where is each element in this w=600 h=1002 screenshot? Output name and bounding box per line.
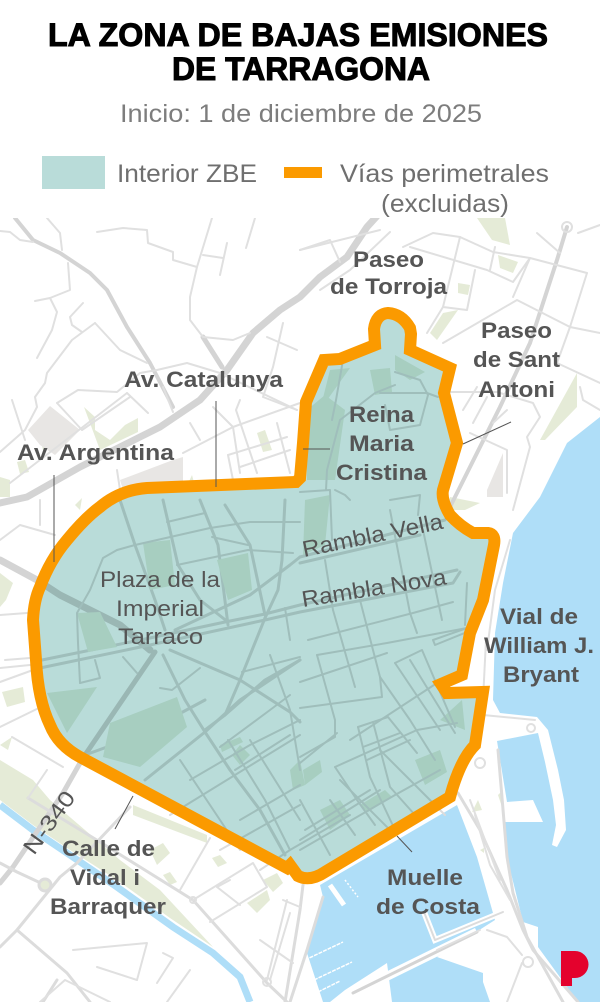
street label: Reina Maria Cristina: Maria	[349, 431, 415, 456]
legend swatch: interior ZBE	[42, 156, 105, 189]
place label: Plaza de la Imperial Tarraco	[102, 571, 220, 644]
street label: Calle de Vidal i Barraquer: Calle de	[62, 836, 155, 861]
street label: Paseo de Torroja: Paseo	[353, 247, 424, 272]
interior parks	[47, 355, 465, 830]
place label: Plaza de la Imperial Tarraco: Tarraco	[118, 624, 203, 649]
street label: N-340: N-340	[18, 786, 80, 859]
street label: Vial de William J. Bryant: William J.	[484, 633, 594, 658]
ZBE perimeter roads	[33, 313, 494, 878]
secondary roads	[0, 500, 578, 1002]
legend label: perimeter roads	[340, 160, 549, 218]
place label: Plaza de la Imperial Tarraco: Plaza de la	[100, 567, 221, 592]
water: sea and port	[0, 417, 600, 1002]
street label: Vial de William J. Bryant: Bryant	[503, 662, 580, 687]
place label: Plaza de la Imperial Tarraco: Imperial	[116, 596, 204, 621]
land details: piers	[305, 880, 503, 1002]
street label: Calle de Vidal i Barraquer: Barraquer	[50, 894, 166, 919]
legend label: perimeter roads: Vías perimetrales	[340, 160, 549, 188]
street label: Calle de Vidal i Barraquer: Vidal i	[70, 865, 140, 890]
street label: Muelle de Costa: Muelle	[387, 865, 463, 890]
street label: Paseo de Torroja	[331, 252, 448, 298]
title	[48, 17, 548, 87]
street label: Reina Maria Cristina: Cristina	[336, 460, 428, 485]
title: LA ZONA DE BAJAS EMISIONES	[48, 17, 548, 53]
legend label: interior ZBE: Interior ZBE	[117, 160, 257, 188]
street label: Paseo de Sant Antoni: Paseo	[481, 318, 552, 343]
leader lines	[54, 401, 511, 852]
street label: Vial de William J. Bryant: Vial de	[500, 604, 578, 629]
interior streets	[77, 360, 467, 870]
map	[0, 216, 600, 1002]
street label: Reina Maria Cristina	[337, 406, 428, 480]
major roads	[0, 216, 567, 993]
street label: Muelle de Costa: de Costa	[376, 894, 481, 919]
street label: Av. Catalunya: Av. Catalunya	[124, 367, 284, 392]
title: DE TARRAGONA	[172, 51, 430, 87]
legend	[42, 156, 549, 218]
street label: Rambla Nova: Rambla Nova	[300, 564, 448, 612]
street label: Av. Argentina: Av. Argentina	[17, 440, 175, 465]
street label: Paseo de Sant Antoni: de Sant	[473, 347, 561, 372]
street label: Paseo de Sant Antoni	[474, 322, 560, 397]
legend label: perimeter roads: (excluidas)	[381, 190, 509, 218]
logo: red P	[561, 951, 588, 986]
minor roads	[0, 218, 600, 1002]
street label: Muelle de Costa	[377, 869, 480, 914]
street label: Calle de Vidal i Barraquer	[50, 836, 166, 919]
street label: Paseo de Sant Antoni: Antoni	[478, 377, 555, 402]
street label: Rambla Vella: Rambla Vella	[300, 509, 446, 562]
street label: Reina Maria Cristina: Reina	[349, 402, 415, 427]
legend swatch: perimeter roads	[284, 167, 322, 178]
street label: Paseo de Torroja: de Torroja	[330, 274, 448, 299]
land use: green areas and blocks	[0, 218, 577, 947]
ZBE interior area	[33, 313, 495, 878]
subtitle: Inicio: 1 de diciembre de 2025	[120, 100, 482, 128]
street label: Vial de William J. Bryant	[484, 604, 594, 687]
